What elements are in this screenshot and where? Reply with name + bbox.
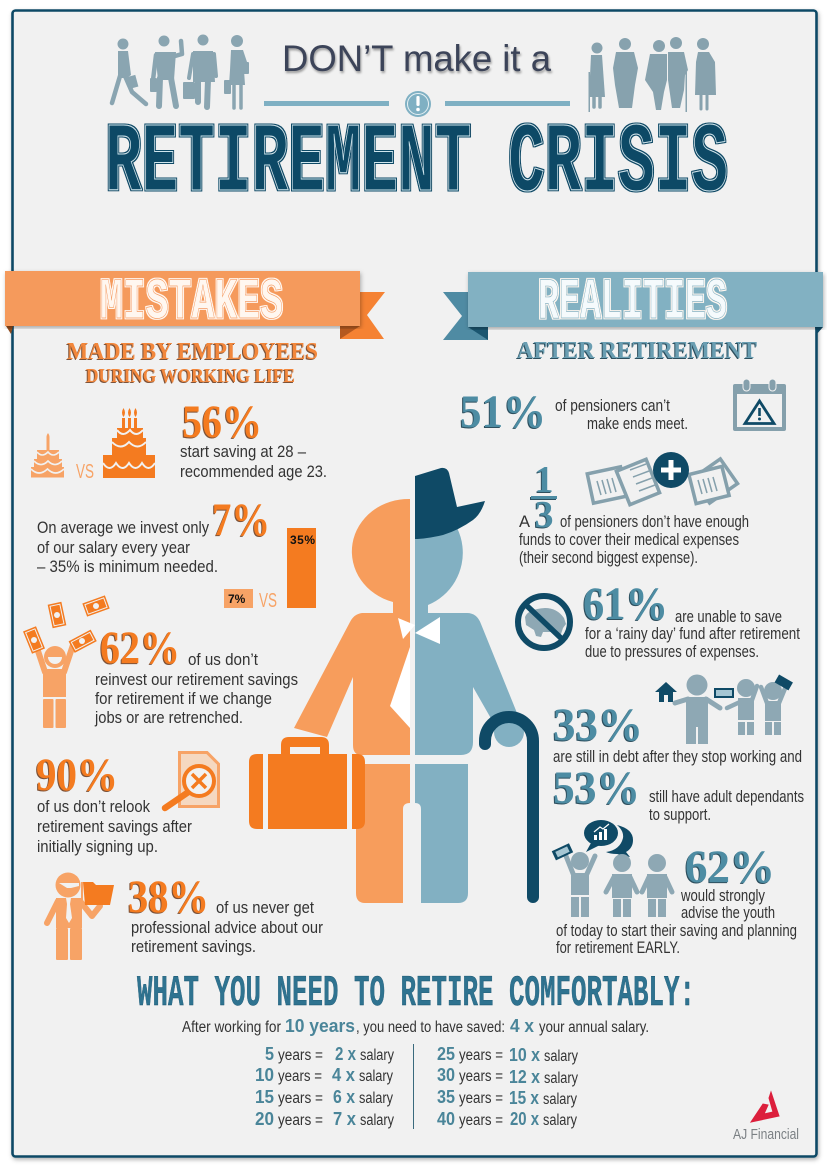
central figure: half worker, half retiree <box>249 468 533 903</box>
table: savings multiples, left column: salary <box>359 1068 393 1085</box>
icon: man with folder <box>47 872 114 960</box>
subheading: made by employees: MADE BY EMPLOYEES <box>67 339 318 365</box>
stat: 90 percent: retirement savings after <box>37 818 192 836</box>
table: savings multiples, right column: 35 <box>437 1087 455 1107</box>
table: savings multiples, right column: 20 x <box>510 1109 539 1129</box>
silhouette: woman with bag <box>224 35 249 108</box>
label: vs: VS <box>76 461 94 483</box>
table: savings multiples, left column: 10 <box>255 1065 274 1085</box>
stat: 7 percent: 7% <box>212 494 270 546</box>
stat: 51 percent: make ends meet. <box>587 415 688 433</box>
text: ten year rule: your annual salary. <box>539 1019 649 1036</box>
table: savings multiples, right column: 10 x <box>509 1045 540 1065</box>
table: savings multiples, right column: 40 <box>437 1109 455 1129</box>
text: ten year rule: 10 years <box>285 1016 355 1036</box>
table: savings multiples, left column: 7 x <box>333 1109 356 1129</box>
figure: hat <box>415 468 485 539</box>
stat: 62 percent would advise <box>552 820 797 957</box>
stat: 56 percent: start saving at 28 – <box>180 443 307 461</box>
table: savings multiples, right column: salary <box>544 1070 578 1087</box>
table: savings multiples, left column: years = <box>278 1112 323 1129</box>
stat: 56 percent <box>31 396 327 483</box>
subheading: after retirement: AFTER RETIREMENT <box>517 338 757 364</box>
text: ten year rule: , you need to have saved: <box>356 1019 505 1036</box>
stat: one third: (their second biggest expense). <box>519 549 698 567</box>
bar chart: 7 vs 35: 7% <box>228 592 246 606</box>
stat: one third <box>519 452 749 567</box>
figure: worker half <box>294 499 410 903</box>
header divider with alert icon <box>264 91 570 117</box>
table: savings multiples, right column <box>437 1044 578 1129</box>
icon: calendar warning <box>733 379 786 431</box>
stat: 7 percent <box>37 494 316 612</box>
icon: cane <box>485 717 533 897</box>
table: savings multiples, left column: salary <box>359 1090 393 1107</box>
stat: 7 percent: of our salary every year <box>37 539 190 557</box>
silhouette: elderly man <box>613 38 638 108</box>
table: savings multiples, right column: 15 x <box>509 1088 539 1108</box>
stat: 62 percent would advise: would strongly <box>680 887 766 905</box>
silhouette: man waving <box>150 36 182 106</box>
stat: 62 percent don't reinvest: reinvest our retirement savings <box>95 671 298 689</box>
header people silhouettes: working age <box>112 34 249 108</box>
stat: 33 and 53 percent: to support. <box>649 806 711 824</box>
table: savings multiples, left column: salary <box>360 1047 394 1064</box>
bar chart: 7 vs 35 <box>224 528 316 612</box>
silhouette: elderly couple <box>645 37 688 112</box>
table: savings multiples, right column: 25 <box>437 1044 455 1064</box>
silhouette: elderly woman <box>695 38 716 109</box>
stat: 90 percent: 90% <box>36 749 118 801</box>
logo: AJ Financial: AJ Financial <box>733 1126 799 1143</box>
table: savings multiples, left column: 2 x <box>335 1044 356 1064</box>
silhouette: man with bag <box>183 34 216 107</box>
stat: 51 percent <box>460 379 786 438</box>
stat: 62 percent don't reinvest: for retirement if we change <box>95 690 272 708</box>
table: savings multiples, left column: years = <box>278 1090 323 1107</box>
stat: 61 percent: 61% <box>583 578 668 630</box>
stat: 62 percent would advise: for retirement EARLY. <box>556 939 680 957</box>
stat: 7 percent: On average we invest only <box>37 519 210 537</box>
stat: 38 percent: 38% <box>128 871 209 923</box>
stat: 62 percent would advise: advise the youth <box>681 904 775 922</box>
stat: 62 percent don't reinvest <box>23 595 298 728</box>
logo: AJ Financial <box>733 1092 799 1143</box>
header people silhouettes: retired <box>588 37 716 112</box>
table: savings multiples, left column: 4 x <box>332 1065 355 1085</box>
table: savings multiples, right column: salary <box>543 1091 577 1108</box>
text: ten year rule <box>182 1016 649 1036</box>
table: savings multiples, right column: 30 <box>437 1065 455 1085</box>
ribbon: mistakes <box>5 271 385 339</box>
table: savings multiples, right column: years = <box>459 1090 503 1107</box>
stat: one third: of pensioners don’t have enough <box>560 513 749 531</box>
stat: 61 percent: are unable to save <box>675 608 782 626</box>
silhouette: elderly woman with cane <box>588 42 605 112</box>
figure: bow tie and tie <box>390 617 440 728</box>
stat: 33 and 53 percent <box>553 674 804 824</box>
table: savings multiples, right column: years = <box>459 1112 503 1129</box>
bar chart: 7 vs 35: VS <box>259 590 277 612</box>
table: savings multiples, right column: years = <box>459 1047 503 1064</box>
stat: one third: A <box>519 513 530 531</box>
icon: exclamation badge <box>405 91 431 117</box>
figure: retiree half <box>415 497 524 903</box>
stat: 38 percent: retirement savings. <box>131 938 256 956</box>
table: savings multiples, right column: 12 x <box>509 1067 540 1087</box>
stat: 62 percent would advise: 62% <box>685 841 775 893</box>
stat: 33 and 53 percent: 33% <box>553 699 643 751</box>
subtitle: DON’T make it a <box>282 38 551 79</box>
stat: 62 percent don't reinvest: 62% <box>100 622 180 674</box>
silhouette: walking woman <box>112 38 146 104</box>
table: savings multiples, left column: 20 <box>255 1109 274 1129</box>
table: savings multiples, left column: salary <box>360 1112 394 1129</box>
table: savings multiples, left column: years = <box>278 1047 323 1064</box>
table: savings multiples, right column: salary <box>544 1048 578 1065</box>
subheading: made by employees: DURING WORKING LIFE <box>86 365 295 387</box>
bar chart: 7 vs 35: 35% <box>290 533 315 547</box>
table: savings multiples, right column: salary <box>543 1112 577 1129</box>
stat: 90 percent: of us don’t relook <box>37 798 151 816</box>
heading: mistakes: MISTAKES <box>100 271 283 336</box>
icon: advising youth <box>552 820 672 917</box>
stat: 38 percent <box>47 871 323 960</box>
stat: 38 percent: of us never get <box>216 899 314 917</box>
stat: 51 percent: 51% <box>460 386 546 438</box>
stat: 61 percent <box>518 578 800 661</box>
icon: man throwing money <box>23 595 110 728</box>
stat: 90 percent: initially signing up. <box>37 838 158 856</box>
stat: 90 percent <box>36 749 218 856</box>
table: savings multiples, left column: 15 <box>255 1087 274 1107</box>
text: ten year rule: After working for <box>182 1019 281 1036</box>
table: savings multiples, left column: 6 x <box>333 1087 355 1107</box>
stat: 51 percent: of pensioners can’t <box>555 397 670 415</box>
stat: 62 percent don't reinvest: of us don’t <box>188 651 258 669</box>
divider between table columns <box>413 1044 414 1129</box>
table: savings multiples, left column: 5 <box>265 1044 274 1064</box>
stat: 61 percent: due to pressures of expenses. <box>585 643 759 661</box>
ribbon: realities <box>443 271 823 340</box>
icon: briefcase <box>249 737 365 829</box>
stat: 56 percent: 56% <box>182 396 262 448</box>
table: savings multiples, left column <box>255 1044 394 1129</box>
stat: 38 percent: professional advice about our <box>131 919 323 937</box>
stat: 33 and 53 percent: 53% <box>553 762 640 814</box>
icon: debt and dependants <box>655 674 793 744</box>
stat: one third: funds to cover their medical expenses <box>519 531 739 549</box>
table: savings multiples, left column: years = <box>278 1068 322 1085</box>
icon: large cake <box>103 408 155 478</box>
subheading: made by employees <box>67 339 318 387</box>
fraction: 3 <box>534 494 554 536</box>
icon: no piggy bank <box>518 596 570 648</box>
icon: medical bills <box>587 452 738 505</box>
icon: plus <box>653 452 689 488</box>
stat: 56 percent: recommended age 23. <box>180 463 327 481</box>
stat: 7 percent: – 35% is minimum needed. <box>37 558 218 576</box>
fraction: 1 <box>534 459 554 501</box>
icon: small cake <box>31 433 64 478</box>
stat: 62 percent don't reinvest: jobs or are retrenched. <box>94 709 243 727</box>
icon: magnifier over document <box>165 752 218 808</box>
table: savings multiples, right column: years = <box>459 1068 503 1085</box>
fraction <box>531 459 557 536</box>
text: ten year rule: 4 x <box>510 1016 534 1036</box>
